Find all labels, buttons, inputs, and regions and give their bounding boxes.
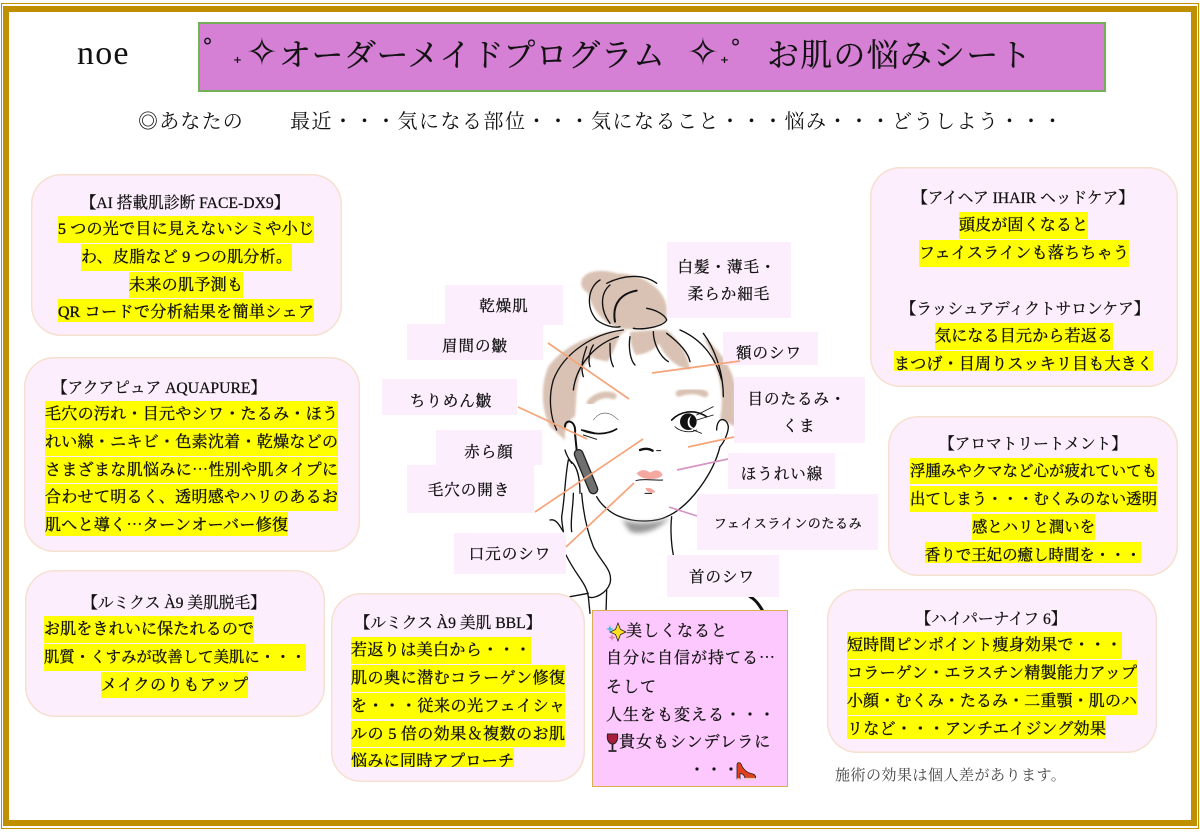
text block: さまざまな肌悩みに…性別や肌タイプに xyxy=(45,457,338,480)
text block xyxy=(847,632,1137,739)
text block: 出てしまう・・・むくみのない透明 xyxy=(910,491,1157,508)
subtitle line: 最近・・・気になる部位・・・気になること・・・悩み・・・どうしよう・・・ xyxy=(290,111,1064,133)
text block: IHAIR: フェイスラインも落ちちゃう xyxy=(919,245,1129,262)
label: 額のシワ: 額のシワ xyxy=(736,344,802,362)
title banner: ° xyxy=(202,35,213,60)
heading: lash care: 【ラッシュアディクトサロンケア】 xyxy=(901,300,1149,318)
text block: 浮腫みやクマなど心が疲れていても xyxy=(910,463,1157,480)
note box: message: 自分に自信が持てる… xyxy=(606,645,776,668)
label: 目のたるみ・くま: 目のたるみ・ xyxy=(747,390,847,408)
heading: 【ハイパーナイフ 6】 xyxy=(915,610,1067,628)
text block: 毛穴の汚れ・目元やシワ・たるみ・ほう xyxy=(45,406,338,423)
eyebrows xyxy=(590,391,705,403)
label: 乾燥肌: 乾燥肌 xyxy=(479,298,529,314)
text block: れい線・ニキビ・色素沈着・乾燥などの xyxy=(45,434,338,451)
title banner: ✧ xyxy=(246,30,278,74)
text block: 肌質・くすみが改善して美肌に・・・ xyxy=(44,649,306,666)
text block: コラーゲン・エラスチン精製能力アップ xyxy=(847,665,1137,682)
heading: 【アロマトリートメント】 xyxy=(939,436,1127,452)
panel: AI skin diagnosis xyxy=(31,174,342,336)
heading: 【アクアピュア AQUAPURE】 xyxy=(52,380,266,396)
title banner: オーダーメイドプログラム xyxy=(279,37,665,73)
label: 口元のシワ: 口元のシワ xyxy=(469,546,551,562)
label: 眉間の皺 xyxy=(407,324,543,360)
label: 首のシワ xyxy=(667,555,779,597)
title banner: ₊ xyxy=(233,48,242,68)
title banner: ° xyxy=(730,36,741,61)
icon: sparkles xyxy=(606,622,626,642)
heading: 【AI 搭載肌診断 FACE-DX9】 xyxy=(81,194,289,212)
note box: message: そして xyxy=(606,679,657,696)
icon: wine glass xyxy=(606,734,618,752)
text block: 小顔・むくみ・たるみ・二重顎・肌のハ xyxy=(847,693,1137,710)
text block: 若返りは美白から・・・ xyxy=(351,642,531,659)
text block: QR コードで分析結果を簡単シェア xyxy=(58,304,314,321)
label: 口元のシワ xyxy=(454,533,566,574)
text block: メイクのりもアップ xyxy=(101,677,248,694)
label: ちりめん皺: ちりめん皺 xyxy=(410,392,492,410)
eye xyxy=(680,413,697,430)
title banner: ✧ xyxy=(687,30,719,74)
panel: Lumix A9 BBL xyxy=(331,593,585,782)
logo: noe: noe xyxy=(77,35,130,72)
text block: 5 つの光で目に見えないシミや小じ xyxy=(58,221,314,238)
illustration: woman's face with roller xyxy=(542,270,764,614)
text block: 感とハリと潤いを xyxy=(972,519,1095,536)
label: ほうれい線 xyxy=(728,453,835,489)
text block: IHAIR xyxy=(919,212,1129,267)
text block: を・・・従来の光フェイシャ xyxy=(351,698,565,715)
roller xyxy=(579,454,593,489)
heading: 【ルミクス À9 美肌 BBL】 xyxy=(355,614,541,632)
text block: IHAIR: 頭皮が固くなると xyxy=(959,217,1088,234)
text block xyxy=(58,216,314,322)
note box: message: ・・・ xyxy=(689,762,740,779)
label: 額のシワ xyxy=(723,332,818,365)
heading: IHAIR: 【アイヘア IHAIR ヘッドケア】 xyxy=(912,190,1134,206)
text block: 肌の奥に潜むコラーゲン修復 xyxy=(351,670,565,687)
panel: AQUAPURE xyxy=(24,357,360,552)
text block: リなど・・・アンチエイジング効果 xyxy=(847,721,1106,738)
label: 赤ら顔: 赤ら顔 xyxy=(464,444,514,460)
text block: 未来の肌予測も xyxy=(129,277,243,294)
label: 白髪・薄毛・柔らか細毛: 白髪・薄毛・ xyxy=(677,258,777,276)
heading: 【ルミクス À9 美肌脱毛】 xyxy=(82,594,266,612)
note box: message xyxy=(592,610,788,787)
subtitle line: ◎あなたの xyxy=(138,111,244,133)
label: 乾燥肌 xyxy=(445,285,563,325)
icon: high heel xyxy=(736,762,756,780)
note box: message: 美しくなると xyxy=(626,623,728,640)
text block: lash care xyxy=(894,323,1153,371)
label: 白髪・薄毛・柔らか細毛 xyxy=(667,242,791,318)
label: 赤ら顔 xyxy=(436,430,542,465)
text block: お肌をきれいに保たれるので xyxy=(44,621,254,638)
label: 眉間の皺: 眉間の皺 xyxy=(442,338,508,354)
text block: 肌へと導く…ターンオーバー修復 xyxy=(45,512,288,535)
text block: わ、皮脂など 9 つの肌分析。 xyxy=(81,249,292,266)
title banner xyxy=(198,22,1106,92)
title banner: ₊ xyxy=(720,48,729,68)
panel: IHAIR and lash care xyxy=(870,167,1178,387)
text block xyxy=(910,458,1157,563)
note box: message: 人生をも変える・・・ xyxy=(606,707,776,724)
text block: lash care: 気になる目元から若返る xyxy=(935,328,1113,345)
label: フェイスラインのたるみ xyxy=(697,494,878,550)
panel: Hyper Knife 6 xyxy=(827,589,1157,753)
label: 首のシワ: 首のシワ xyxy=(689,568,755,586)
text block: ルの 5 倍の効果＆複数のお肌 xyxy=(351,726,565,743)
text block xyxy=(45,401,338,536)
note box: message: 貴女もシンデレラに xyxy=(619,734,771,751)
disclaimer: 施術の効果は個人差があります。 xyxy=(835,768,1066,784)
label: 目のたるみ・くま: くま xyxy=(782,418,816,434)
neck shadow xyxy=(622,517,669,533)
label: フェイスラインのたるみ: フェイスラインのたるみ xyxy=(714,516,862,530)
text block xyxy=(351,637,565,767)
panel: Lumix A9 hair removal xyxy=(25,570,325,717)
label: 毛穴の開き xyxy=(407,465,534,513)
text block: 短時間ピンポイント痩身効果で・・・ xyxy=(847,637,1122,654)
lips xyxy=(637,470,663,493)
text block: 合わせて明るく、透明感やハリのあるお xyxy=(45,489,338,506)
text block xyxy=(44,616,306,698)
title banner: お肌の悩みシート xyxy=(767,37,1033,73)
label: 毛穴の開き: 毛穴の開き xyxy=(428,482,510,498)
label: ほうれい線: ほうれい線 xyxy=(741,466,823,482)
label: ちりめん皺 xyxy=(382,379,517,415)
panel: aroma treatment xyxy=(888,416,1178,576)
label: 目のたるみ・くま xyxy=(734,377,865,443)
label: 白髪・薄毛・柔らか細毛: 柔らか細毛 xyxy=(688,286,770,302)
